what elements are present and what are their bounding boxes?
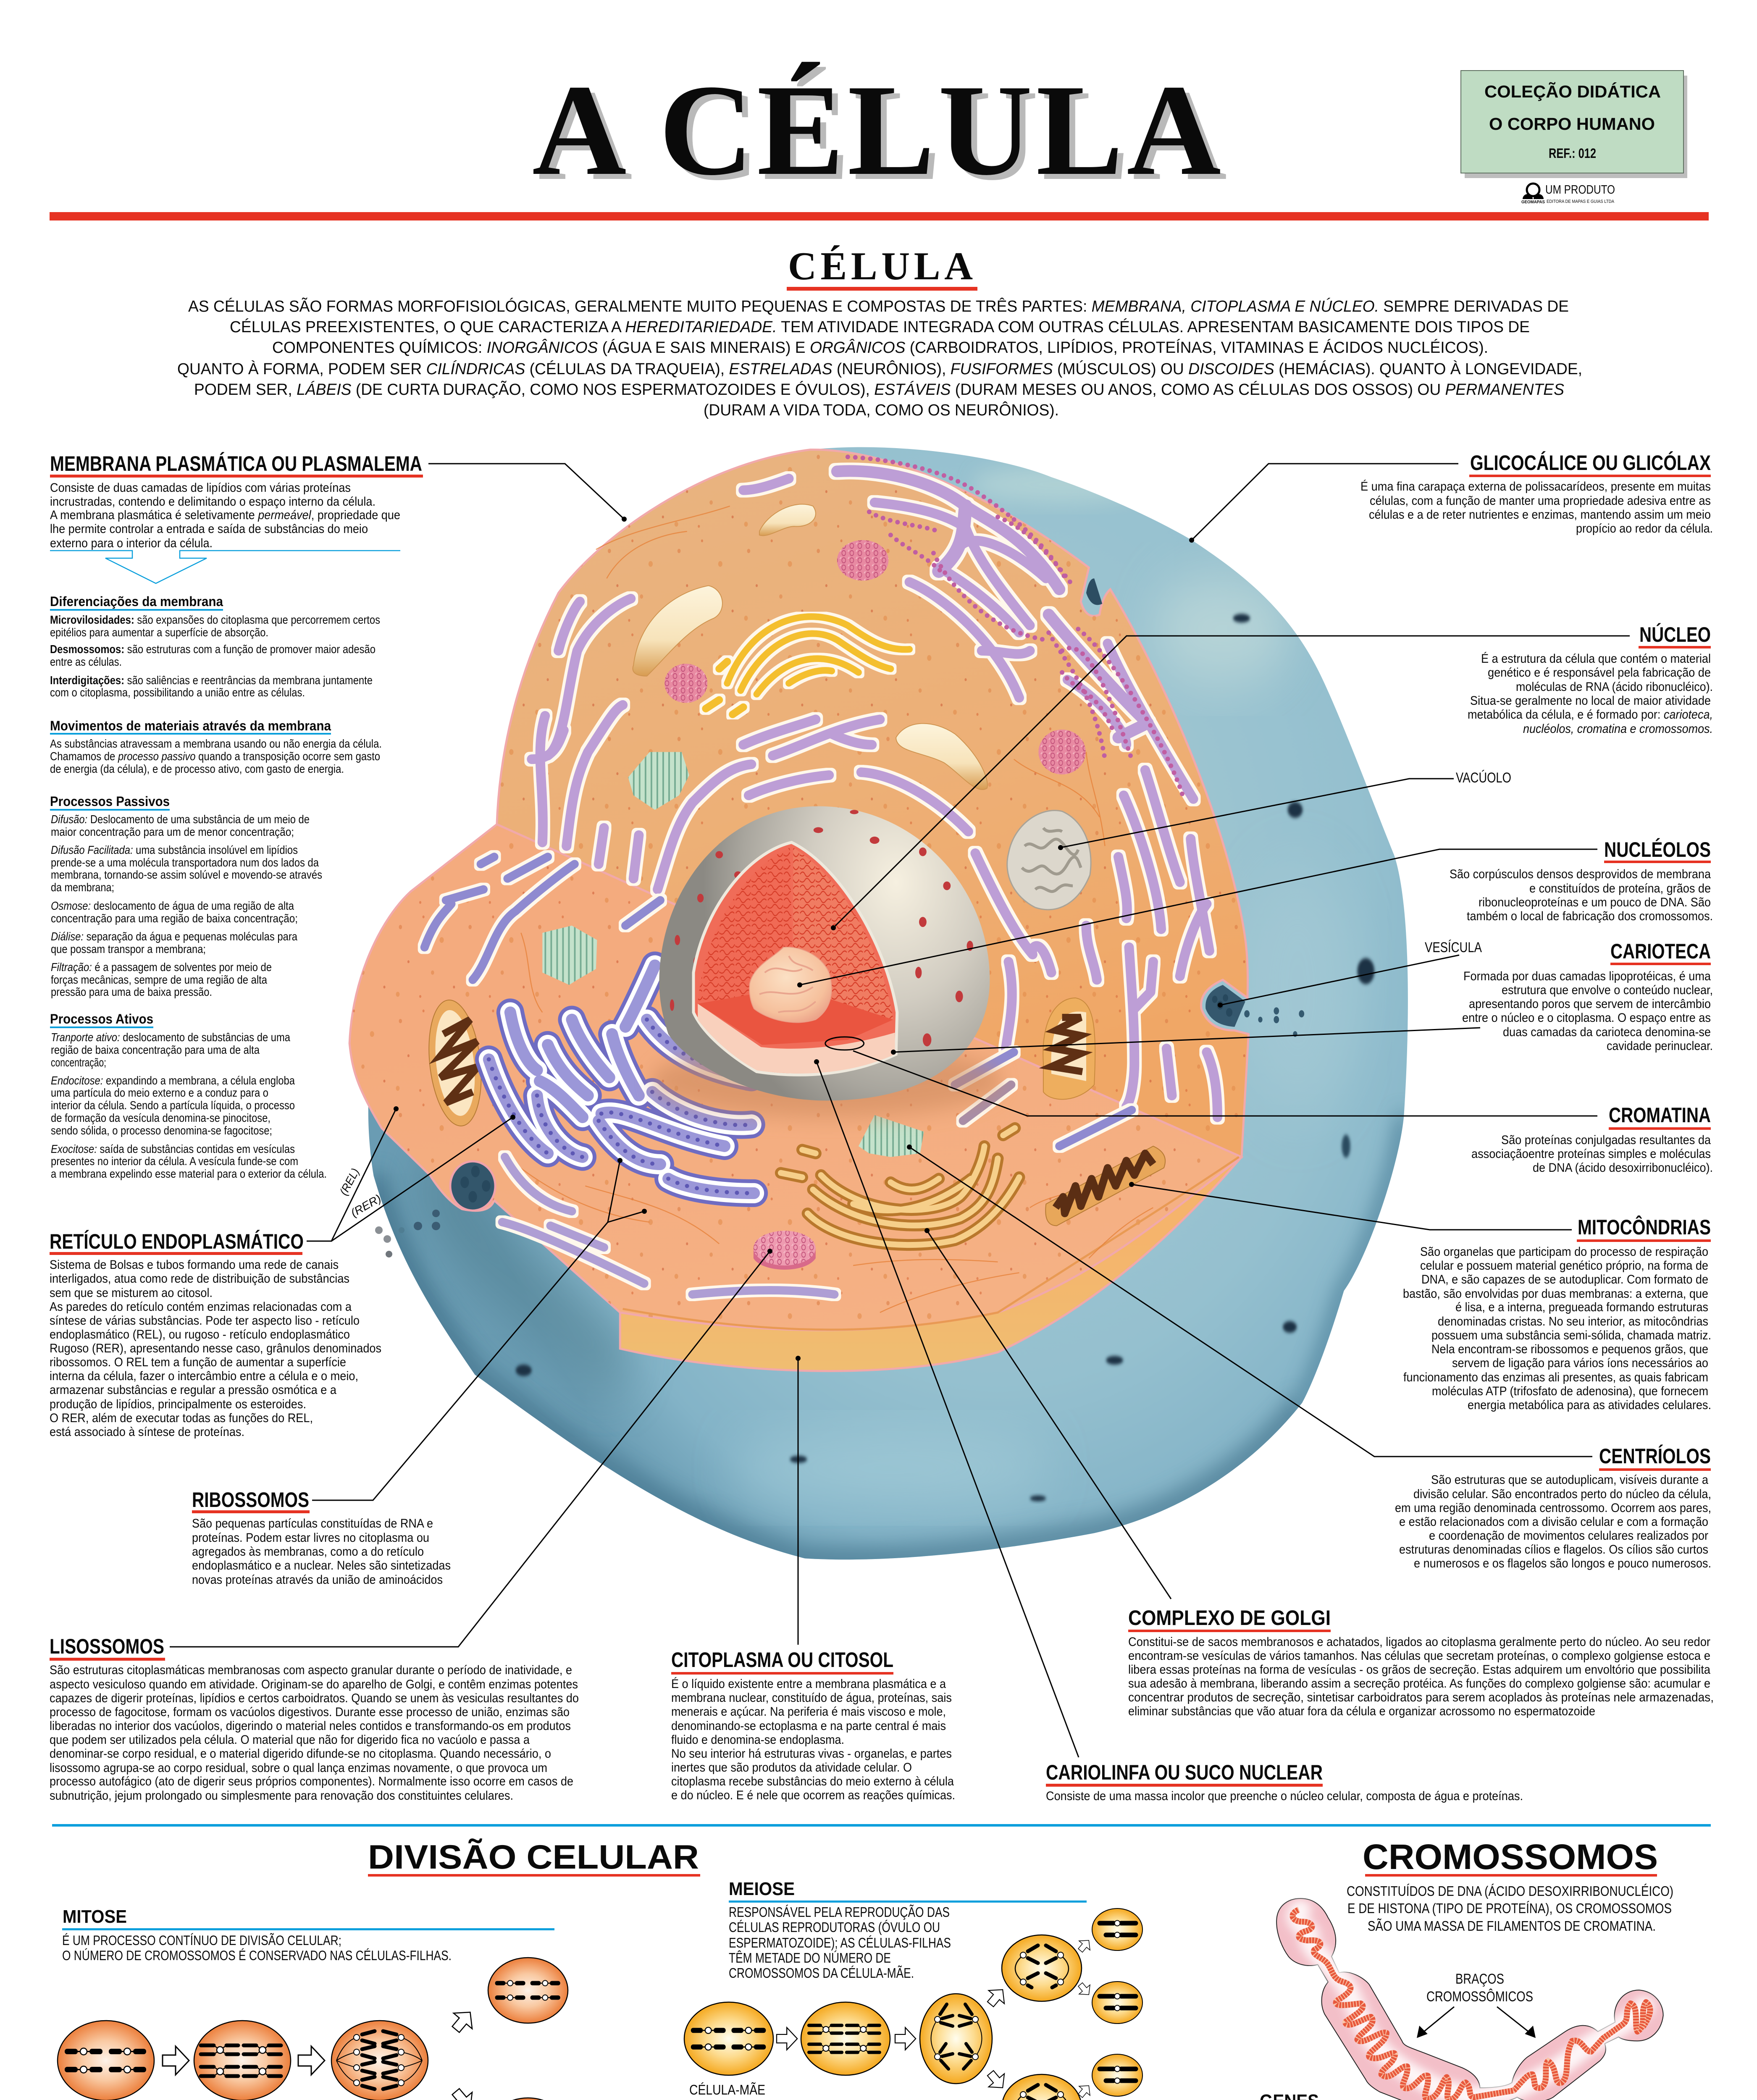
chromosomes description <box>1347 1883 1673 1934</box>
panel: nucleoli: também o local de fabricação dos cromossomos. <box>1467 909 1713 923</box>
leader lines <box>170 464 1630 1757</box>
meiosis heading: ESPERMATOZOIDE); AS CÉLULAS-FILHAS <box>729 1935 951 1950</box>
text block: movement across membrane: As substâncias atravessam a membrana usando ou não energia da célula. <box>50 737 382 750</box>
label: vacuole: VACÚOLO <box>1456 770 1511 786</box>
panel: nucleus: moléculas de RNA (ácido ribonucléico). <box>1516 680 1713 694</box>
text block: movement across membrane: Movimentos de materiais através da membrana <box>50 718 331 733</box>
text block: passive processes: prende-se a uma molécula transportadora num dos lados da <box>51 856 319 869</box>
publisher mark: GEOMAPAS <box>1521 200 1545 205</box>
panel: karyotheca: CARIOTECA <box>1610 940 1711 963</box>
panel: endoplasmic reticulum <box>50 1230 381 1439</box>
panel: endoplasmic reticulum: armazenar substâncias e regular a pressão osmótica e a <box>50 1383 336 1397</box>
panel: lysosomes: aspecto vesiculoso quando em atividade. Originam-se do aparelho de Golgi, e contêm enzimas potentes <box>50 1677 578 1691</box>
panel: cytoplasm: É o líquido existente entre a membrana plasmática e a <box>671 1677 946 1691</box>
collection badge: COLEÇÃO DIDÁTICA <box>1484 82 1661 101</box>
label: REL: (REL) <box>337 1166 362 1197</box>
meiosis heading: CÉLULAS REPRODUTORAS (ÓVULO OU <box>729 1919 940 1935</box>
panel: glycocalyx: propício ao redor da célula. <box>1576 522 1713 536</box>
cytoplasm back wall <box>497 450 1248 1157</box>
text block: active processes: Processos Ativos <box>50 1011 153 1026</box>
metaphase spindle cell <box>331 2021 428 2100</box>
panel: karyotheca: apresentando poros que servem de intercâmbio <box>1469 997 1711 1011</box>
text block: membrane differentiations: com o citoplasma, possibilitando a união entre as células. <box>50 686 305 699</box>
endoplasmic reticulum on the floor <box>425 857 1132 1294</box>
panel: mitochondria: possuem uma substância semi-sólida, chamada matriz. <box>1431 1328 1711 1342</box>
text block: active processes: sendo sólida, o processo denomina-se fagocitose; <box>51 1124 272 1137</box>
panel: lysosomes: processo autofágico (ato de digerir seus próprios componentes). Normalmente isso ocorre em casos de <box>50 1774 573 1788</box>
daughter cell bottom <box>488 2098 568 2100</box>
panel: chromatin: CROMATINA <box>1609 1103 1711 1127</box>
text block: passive processes: membrana, tornando-se assim solúvel e movendo-se através <box>51 868 322 881</box>
panel: golgi complex: eliminar substâncias que vão atuar fora da célula e organizar acrossomo no espermatozoide <box>1128 1704 1595 1718</box>
panel: karyotheca <box>1462 940 1713 1053</box>
mitosis heading: MITOSE <box>63 1906 127 1927</box>
panel: golgi complex <box>1128 1606 1714 1718</box>
panel: nucleus: nucléolos, cromatina e cromossomos. <box>1523 722 1713 736</box>
text block: movement across membrane: de energia (da célula), e de processo ativo, com gasto de energia. <box>50 762 344 775</box>
panel: centrioles: e coordenação de movimentos celulares realizados por <box>1429 1529 1708 1543</box>
daughter cells <box>1092 1908 1142 2100</box>
mitosis heading <box>62 1906 554 1963</box>
smooth reticulum on the wall <box>532 479 1217 1117</box>
panel: nucleus: Situa-se geralmente no local de maior atividade <box>1470 694 1711 708</box>
panel: ribosomes: São pequenas partículas constituídas de RNA e <box>192 1517 433 1530</box>
text block: active processes: presentes no interior da célula. A vesícula funde-se com <box>51 1155 298 1168</box>
panel: mitochondria: denominadas cristas. No seu interior, as mitocôndrias <box>1438 1315 1708 1328</box>
panel: karyotheca: estrutura que envolve o conteúdo nuclear, <box>1502 983 1713 997</box>
panel: mitochondria: bastão, são envolvidas por duas membranas: a externa, que <box>1403 1287 1708 1301</box>
intro text: AS CÉLULAS SÃO FORMAS MORFOFISIOLÓGICAS, GERALMENTE MUITO PEQUENAS E COMPOSTAS DE TRÊS PARTES: MEMBRANA, CITOPLASMA E NÚCLEO. SEMPRE DERIVADAS DE <box>188 297 1569 315</box>
nuclear slab <box>698 1004 895 1074</box>
text block: passive processes <box>50 794 322 998</box>
panel: cytoplasm: citoplasma recebe substâncias do meio externo à célula <box>671 1774 954 1788</box>
panel: endoplasmic reticulum: interna da célula, fazer o intercâmbio entre a célula e o meio, <box>50 1369 358 1383</box>
mitosis arrows <box>163 2004 480 2100</box>
rough endoplasmic reticulum on the wall <box>837 471 1193 799</box>
panel: nucleus: É a estrutura da célula que contém o material <box>1481 652 1711 666</box>
panel: glycocalyx: células, com a função de manter uma propriedade adesiva entre as <box>1370 494 1711 508</box>
panel: lysosomes: liberadas no interior dos vacúolos, digerindo o material neles contidos e transformando-os em produtos <box>50 1719 571 1733</box>
meiosis heading: CROMOSSOMOS DA CÉLULA-MÃE. <box>729 1965 914 1981</box>
nucleus cutaway interior <box>693 843 897 1075</box>
panel: lysosomes: processo de fagocitose, formam os vacúolos digestivos. Durante esse processo de união, enzimas são <box>50 1705 570 1719</box>
panel: lysosomes: São estruturas citoplasmáticas membranosas com aspecto granular durante o período de inatividade, e <box>50 1663 572 1677</box>
lysosome disc on the floor <box>754 1231 816 1270</box>
panel: ribosomes: proteínas. Podem estar livres no citoplasma ou <box>192 1531 429 1545</box>
panel: chromosomes <box>1260 1837 1673 2100</box>
text block: active processes: Tranporte ativo: deslocamento de substâncias de uma <box>51 1031 290 1044</box>
panel: golgi complex: concentrar produtos de secreção, sintetisar carboidratos para serem acoplados às proteínas nele armazenadas, <box>1128 1690 1714 1704</box>
panel: endoplasmic reticulum: produção de lipídios, principalmente os esteroides. <box>50 1397 306 1411</box>
panel: cytoplasm: membrana nuclear, constituído de água, proteínas, sais <box>671 1691 952 1705</box>
nucleus <box>649 806 1003 1117</box>
section heading: célula: CÉLULA <box>788 244 973 288</box>
chromosomes description: CONSTITUÍDOS DE DNA (ÁCIDO DESOXIRRIBONUCLÉICO) <box>1347 1883 1673 1899</box>
daughter cell top <box>488 1958 568 2023</box>
dividing tall cell <box>920 1994 992 2084</box>
panel: cytoplasm: fluido e denomina-se endoplasma. <box>671 1733 844 1747</box>
text block: active processes: uma partícula do meio externo e a conduz para o <box>51 1086 268 1099</box>
panel: golgi complex: sua adesão à membrana, liberando assim a secreção protéica. As funções do complexo golgiense são: acumular e <box>1128 1677 1710 1690</box>
centrioles on the floor <box>542 926 924 1157</box>
panel: plasma membrane: incrustradas, contendo e delimitando o espaço interno da célula. <box>50 495 376 509</box>
panel: mitochondria: celular e possuem material genético próprio, na forma de <box>1420 1259 1708 1273</box>
intro text: PODEM SER, LÁBEIS (DE CURTA DURAÇÃO, COMO NOS ESPERMATOZOIDES E ÓVULOS), ESTÁVEIS (DURAM MESES OU ANOS, COMO AS CÉLULAS DOS OSSOS) OU PERMANENTES <box>194 381 1564 399</box>
chromosome arms label: BRAÇOS <box>1455 1971 1504 1987</box>
panel: mitochondria: moléculas ATP (trifosfato de adenosina), que fornecem <box>1432 1384 1708 1398</box>
meiosis heading: MEIOSE <box>729 1879 795 1899</box>
panel: karyolymph: Consiste de uma massa incolor que preenche o núcleo celular, composta de água e proteínas. <box>1046 1789 1523 1803</box>
panel: mitochondria: funcionamento das enzimas ali presentes, as quais fabricam <box>1403 1370 1708 1384</box>
golgi on the wall <box>706 617 909 714</box>
intro text: COMPONENTES QUÍMICOS: INORGÂNICOS (ÁGUA E SAIS MINERAIS) E ORGÂNICOS (CARBOIDRATOS, LIPÍDIOS, PROTEÍNAS, VITAMINAS E ÁCIDOS NUCLÉICOS). <box>272 339 1488 357</box>
panel: glycocalyx: É uma fina carapaça externa de polissacarídeos, presente em muitas <box>1360 480 1711 494</box>
panel: endoplasmic reticulum: As paredes do retículo contém enzimas relacionadas com a <box>50 1300 352 1314</box>
panel: ribosomes: endoplasmático e a nuclear. Neles são sintetizadas <box>192 1559 451 1572</box>
mother cell <box>58 2021 154 2100</box>
panel: centrioles: em uma região denominada centrossomo. Ocorrem aos pares, <box>1395 1501 1711 1515</box>
panel: endoplasmic reticulum: RETÍCULO ENDOPLASMÁTICO <box>50 1230 304 1253</box>
text block: active processes: Exocitose: saída de substâncias contidas em vesículas <box>51 1142 295 1155</box>
panel: nucleoli: e constituídos de proteína, grãos de <box>1529 882 1711 895</box>
text block: active processes <box>50 1011 327 1180</box>
panel: karyotheca: Formada por duas camadas lipoprotéicas, é uma <box>1463 969 1711 983</box>
cell illustration <box>349 447 1408 1559</box>
panel: lysosomes: lisossomo agrupa-se ao corpo residual, sobre o qual lança enzimas novamente, o que provoca um <box>50 1761 547 1775</box>
panel: ribosomes: novas proteínas através da união de aminoácidos <box>192 1573 443 1587</box>
panel: mitochondria: energia metabólica para as atividades celulares. <box>1468 1398 1711 1412</box>
panel: chromatin: de DNA (ácido desoxirribonucléico). <box>1533 1161 1713 1175</box>
panel: endoplasmic reticulum: está associado à síntese de proteínas. <box>50 1425 244 1439</box>
text block: membrane differentiations: Microvilosidades: são expansões do citoplasma que percorremem certos <box>50 613 380 626</box>
panel: glycocalyx: células e a de reter nutrientes e enzimas, mantendo assim um meio <box>1369 508 1711 522</box>
panel: ribosomes: agregados às membranas, como a do retículo <box>192 1545 424 1559</box>
panel: lysosomes <box>50 1635 579 1803</box>
panel: centrioles: e numerosos e os flagelos são longos e pouco numerosos. <box>1414 1557 1711 1570</box>
text block: movement across membrane <box>50 718 382 775</box>
chromosomes heading: CROMOSSOMOS <box>1363 1837 1658 1877</box>
panel: endoplasmic reticulum: endoplasmático (REL), ou rugoso - retículo endoplasmático <box>50 1328 350 1341</box>
panel: endoplasmic reticulum: interligados, atua como rede de distribuição de substâncias <box>50 1272 349 1286</box>
panel: nucleus: metabólica da célula, e é formado por: carioteca, <box>1468 708 1713 722</box>
second division cell bottom <box>1002 2074 1082 2100</box>
text block: passive processes: concentração para uma região de baixa concentração; <box>51 912 298 925</box>
panel: plasma membrane: lhe permite controlar a entrada e saída de substâncias do meio <box>50 522 368 536</box>
heading: cell division: DIVISÃO CELULAR <box>368 1838 699 1876</box>
panel: golgi complex: COMPLEXO DE GOLGI <box>1128 1606 1331 1630</box>
panel: karyotheca: cavidade perinuclear. <box>1607 1039 1713 1053</box>
intro text <box>177 297 1582 419</box>
panel: lysosomes: que podem ser utilizados pela célula. O material que não for digerido fica no vacúolo e passa a <box>50 1733 530 1747</box>
panel: ribosomes <box>192 1488 451 1587</box>
panel: endoplasmic reticulum: sem que se misturem ao citosol. <box>50 1286 213 1300</box>
text block: membrane differentiations <box>50 594 380 699</box>
publisher mark: EDITORA DE MAPAS E GUIAS LTDA <box>1547 199 1615 204</box>
collection badge: O CORPO HUMANO <box>1489 114 1655 134</box>
publisher mark <box>1521 183 1615 205</box>
panel: nucleus <box>1468 623 1713 736</box>
chromosomes description: SÃO UMA MASSA DE FILAMENTOS DE CROMATINA. <box>1368 1918 1656 1934</box>
intro text: CÉLULAS PREEXISTENTES, O QUE CARACTERIZA A HEREDITARIEDADE. TEM ATIVIDADE INTEGRADA COM OUTRAS CÉLULAS. APRESENTAM BASICAMENTE DOIS TIPOS DE <box>230 318 1530 336</box>
panel: lysosomes: denominar-se corpo residual, e o material digerido difunde-se no citoplasma. Quando necessário, o <box>50 1747 551 1761</box>
panel: centrioles: CENTRÍOLOS <box>1599 1444 1711 1468</box>
panel: cytoplasm: menerais e açúcar. Na periferia é mais viscoso e mole, <box>671 1705 946 1719</box>
title: A CÉLULA <box>538 63 1227 207</box>
mitosis heading: O NÚMERO DE CROMOSSOMOS É CONSERVADO NAS CÉLULAS-FILHAS. <box>62 1948 452 1963</box>
panel: golgi complex: libera essas proteínas na forma de vesículas - os grãos de secreção. Estas adquirem um envoltório que possibilita <box>1128 1663 1710 1677</box>
panel: endoplasmic reticulum: Sistema de Bolsas e tubos formando uma rede de canais <box>50 1258 339 1272</box>
panel: mitochondria: é lisa, e a interna, pregueada formando estruturas <box>1455 1300 1708 1314</box>
panel: mitochondria: Nela encontram-se ribossomos e pequenos grãos, que <box>1431 1342 1708 1356</box>
text block: passive processes: pressão para uma de baixa pressão. <box>51 985 212 998</box>
text block: passive processes: Diálise: separação da água e pequenas moléculas para <box>51 930 297 943</box>
vacuoles, lysosomes, golgi and centriole on the wall <box>628 504 1091 910</box>
text block: membrane differentiations: entre as células. <box>50 655 122 668</box>
text block: passive processes: forças mecânicas, sempre de uma região de alta <box>51 973 267 986</box>
meiosis heading <box>729 1879 1087 1981</box>
panel: mitochondria: DNA, e são capazes de se autoduplicar. Com formato de <box>1421 1273 1708 1286</box>
nucleolus <box>749 947 832 1023</box>
chromosomes description: E DE HISTONA (TIPO DE PROTEÍNA), OS CROMOSSOMOS <box>1347 1900 1672 1916</box>
rough reticulum stacks on the floor <box>489 965 754 1193</box>
text block: membrane differentiations: epitélios para aumentar a superfície de absorção. <box>50 626 268 639</box>
panel: plasma membrane: Consiste de duas camadas de lipídios com várias proteínas <box>50 481 351 495</box>
golgi complex on the floor <box>781 1128 1019 1245</box>
panel: lysosomes: LISOSSOMOS <box>50 1635 164 1658</box>
panel: plasma membrane: externo para o interior da célula. <box>50 536 213 550</box>
mitochondria <box>422 995 1165 1226</box>
panel: chromatin <box>1471 1103 1713 1175</box>
header rule <box>50 212 1709 220</box>
panel: nucleoli: NUCLÉOLOS <box>1604 838 1711 861</box>
publisher mark: UM PRODUTO <box>1545 183 1615 197</box>
panel: centrioles <box>1395 1444 1711 1570</box>
text block: active processes: a membrana expelindo esse material para o exterior da célula. <box>51 1167 327 1180</box>
title: A CÉLULA <box>532 58 1221 202</box>
text block: membrane differentiations: Desmossomos: são estruturas com a função de promover maior adesão <box>50 643 376 656</box>
text block: passive processes: Osmose: deslocamento de água de uma região de alta <box>51 899 294 912</box>
text block: passive processes: que possam transpor a membrana; <box>51 942 206 956</box>
chromosome arms label <box>1418 1971 1535 2037</box>
panel: mitochondria: MITOCÔNDRIAS <box>1578 1215 1711 1239</box>
panel: lysosomes: capazes de digerir proteínas, lipídios e certos carboidratos. Quando se unem às vesiculas resultantes do <box>50 1691 579 1705</box>
divider <box>52 1824 1711 1827</box>
panel: nucleus: NÚCLEO <box>1639 623 1711 646</box>
text block: active processes: de formação da vesícula denomina-se pinocitose, <box>51 1111 271 1124</box>
panel: plasma membrane: MEMBRANA PLASMÁTICA OU PLASMALEMA <box>50 452 422 475</box>
free vesicles outside the cell <box>375 1210 440 1257</box>
chromosome illustration <box>1276 1898 1663 2100</box>
mother cell <box>684 2002 773 2075</box>
meiosis labels: CÉLULA-MÃE <box>689 2082 765 2097</box>
chromatin marker <box>825 1037 864 1050</box>
panel: nucleoli: São corpúsculos densos desprovidos de membrana <box>1450 867 1711 881</box>
text block: active processes: concentração; <box>51 1056 106 1069</box>
vesicle pouches <box>450 578 1304 1210</box>
panel: endoplasmic reticulum: O RER, além de executar todas as funções do REL, <box>50 1411 313 1425</box>
meiosis arrows <box>777 1936 1094 2100</box>
duplicated chromosomes cell <box>801 2002 890 2075</box>
intro text: (DURAM A VIDA TODA, COMO OS NEURÔNIOS). <box>704 401 1059 419</box>
panel: golgi complex: Constitui-se de sacos membranosos e achatados, ligados ao citoplasma geralmente perto do núcleo. Ao seu redor <box>1128 1635 1710 1649</box>
panel: centrioles: São estruturas que se autoduplicam, visíveis durante a <box>1431 1473 1708 1487</box>
panel: centrioles: e estão relacionados com a divisão celular e com a formação <box>1399 1515 1708 1529</box>
panel: glycocalyx <box>1360 451 1713 536</box>
ribosomes on rough reticulum <box>848 457 1183 795</box>
panel: meiosis <box>684 1879 1169 2100</box>
label: vesicle: VESÍCULA <box>1425 940 1482 956</box>
text block: passive processes: Processos Passivos <box>50 794 170 809</box>
panel: chromatin: associaçãoentre proteínas simples e moléculas <box>1471 1147 1711 1161</box>
panel: nucleoli <box>1450 838 1713 923</box>
label: RER: (RER) <box>349 1192 383 1219</box>
panel: mitochondria: São organelas que participam do processo de respiração <box>1420 1245 1708 1259</box>
collection badge <box>1461 71 1687 178</box>
panel: centrioles: estruturas denominadas cílios e flagelos. Os cílios são curtos <box>1399 1543 1708 1557</box>
collection badge: REF.: 012 <box>1549 146 1596 161</box>
text block: membrane differentiations: Interdigitações: são saliências e reentrâncias da membrana juntamente <box>50 674 373 687</box>
text block: active processes: Endocitose: expandindo a membrana, a célula engloba <box>51 1074 295 1087</box>
panel: endoplasmic reticulum: Rugoso (RER), apresentando nesse caso, grânulos denominados <box>50 1341 381 1355</box>
arrow: membrane to subtopics <box>50 551 400 583</box>
panel: plasma membrane <box>50 452 423 550</box>
panel: cytoplasm: CITOPLASMA OU CITOSOL <box>671 1648 893 1672</box>
panel: karyotheca: duas camadas da carioteca denomina-se <box>1503 1025 1711 1039</box>
text block: passive processes: da membrana; <box>51 881 114 894</box>
panel: nucleus: genético e é responsável pela fabricação de <box>1488 666 1711 680</box>
second division cell top <box>1002 1935 1082 2001</box>
cell exterior: glycocalyx surface <box>368 447 1408 1559</box>
text block: movement across membrane: Chamamos de processo passivo quando a transposição ocorre sem gasto <box>50 750 380 763</box>
duplicated chromosomes cell <box>194 2021 291 2100</box>
panel: mitochondria <box>1403 1215 1711 1412</box>
panel: lysosomes: subnutrição, jejum prolongado ou simplesmente para renovação dos constituintes celulares. <box>50 1789 513 1803</box>
text block: active processes: interior da célula. Sendo a partícula líquida, o processo <box>51 1099 295 1112</box>
meiosis heading: RESPONSÁVEL PELA REPRODUÇÃO DAS <box>729 1904 950 1920</box>
text block: passive processes: maior concentração para um de menor concentração; <box>51 825 294 838</box>
panel: chromatin: São proteínas conjulgadas resultantes da <box>1501 1133 1711 1147</box>
panel: endoplasmic reticulum: síntese de várias substâncias. Pode ter aspecto liso - retículo <box>50 1314 360 1328</box>
panel: cytoplasm <box>671 1648 955 1802</box>
mitosis heading: É UM PROCESSO CONTÍNUO DE DIVISÃO CELULAR; <box>62 1933 341 1948</box>
chromosome arms label: CROMOSSÔMICOS <box>1426 1989 1533 2005</box>
panel: cytoplasm: No seu interior há estruturas vivas - organelas, e partes <box>671 1747 952 1761</box>
panel: cytoplasm: inertes que são produtos da atividade celular. O <box>671 1761 912 1774</box>
panel: karyolymph: CARIOLINFA OU SUCO NUCLEAR <box>1046 1761 1323 1784</box>
panel: endoplasmic reticulum: ribossomos. O REL tem a função de aumentar a superfície <box>50 1355 346 1369</box>
panel: cytoplasm: denominando-se ectoplasma e na parte central é mais <box>671 1719 946 1733</box>
panel: mitochondria: servem de ligação para vários íons necessários ao <box>1452 1356 1708 1370</box>
panel: nucleoli: ribonucleoproteínas e um pouco de DNA. São <box>1479 895 1711 909</box>
text block: passive processes: Difusão: Deslocamento de uma substância de um meio de <box>51 813 310 826</box>
intro text: QUANTO À FORMA, PODEM SER CILÍNDRICAS (CÉLULAS DA TRAQUEIA), ESTRELADAS (NEURÔNIOS), FUSIFORMES (MÚSCULOS) OU DISCOIDES (HEMÁCIAS). QUANTO À LONGEVIDADE, <box>177 360 1582 378</box>
nuclear pores <box>670 810 973 1046</box>
nuclear envelope dome <box>659 806 990 1100</box>
cytoplasm floor and cut band <box>349 506 1242 1371</box>
panel: ribosomes: RIBOSSOMOS <box>192 1488 309 1512</box>
text block: membrane differentiations: Diferenciações da membrana <box>50 594 223 609</box>
panel: centrioles: divisão celular. São encontrados perto do núcleo da célula, <box>1413 1487 1711 1501</box>
panel: golgi complex: encontram-se vesículas de vários tamanhos. Nas células que secretam proteínas, o complexo golgiense estoca e <box>1128 1649 1710 1663</box>
text block: active processes: região de baixa concentração para uma de alta <box>51 1043 260 1056</box>
text block: passive processes: Difusão Facilitada: uma substância insolúvel em lipídios <box>51 843 298 856</box>
panel: mitosis <box>58 1906 574 2100</box>
panel: karyolymph <box>1046 1761 1523 1803</box>
meiosis heading: TÊM METADE DO NÚMERO DE <box>729 1950 891 1966</box>
panel: cytoplasm: e do núcleo. E é nele que ocorrem as reações químicas. <box>671 1788 955 1802</box>
panel: karyotheca: entre o núcleo e o citoplasma. O espaço entre as <box>1462 1011 1711 1025</box>
panel: plasma membrane: A membrana plasmática é seletivamente permeável, propriedade que <box>50 508 400 522</box>
text block: passive processes: Filtração: é a passagem de solventes por meio de <box>51 961 272 974</box>
